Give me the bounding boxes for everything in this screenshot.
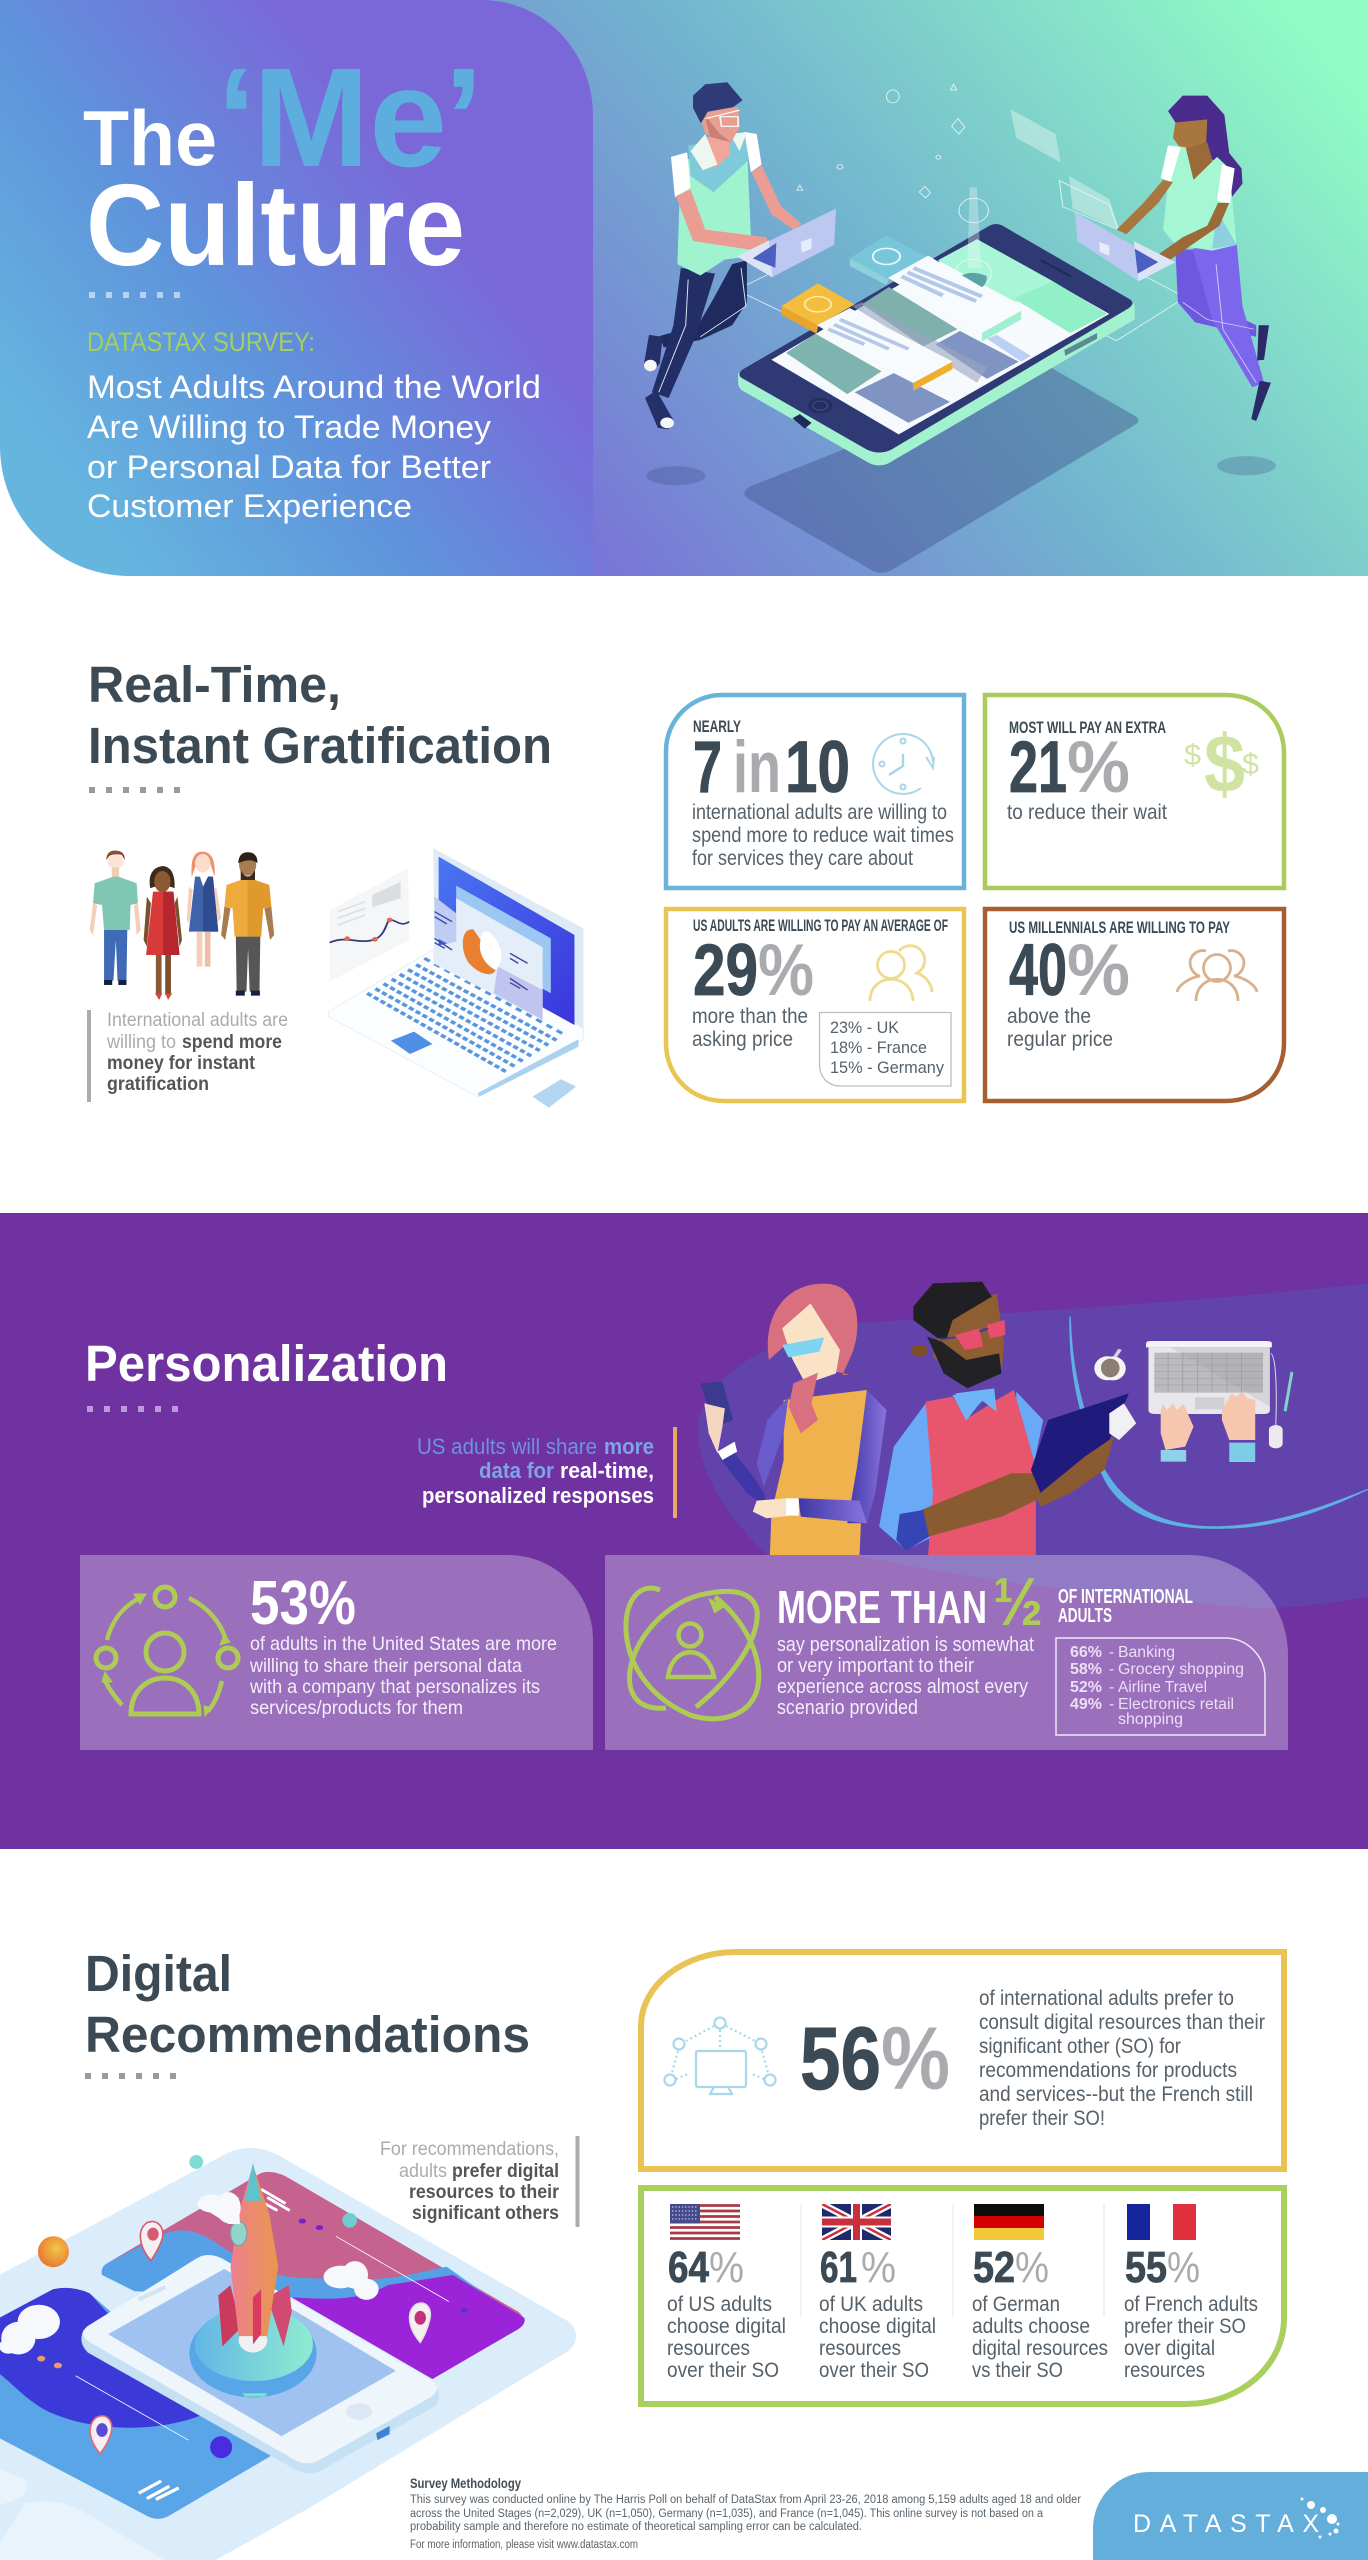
description: say personalization is somewhat xyxy=(777,1633,1034,1656)
description: consult digital resources than their xyxy=(979,2011,1265,2034)
stat card: 21%: to reduce their wait xyxy=(1007,801,1167,824)
stat card: 21% xyxy=(985,695,1284,888)
stat card: 29%: US ADULTS ARE WILLING TO PAY AN AVERAGE OF xyxy=(693,916,948,935)
description: of adults in the United States are more xyxy=(250,1633,557,1655)
subtitle xyxy=(87,369,541,524)
big number xyxy=(1009,930,1130,1011)
caption: share more data: data for xyxy=(479,1458,554,1483)
description: spend more to reduce wait times xyxy=(692,824,954,847)
text: USA: of US adults xyxy=(667,2293,772,2316)
phone shadow and floor shadows xyxy=(647,367,1276,573)
text: Germany: 52 xyxy=(973,2243,1015,2292)
panel: more than half: ADULTS xyxy=(1058,1605,1112,1627)
big number: 7 xyxy=(693,727,722,808)
description: significant other (SO) for xyxy=(979,2035,1181,2058)
icon: dollar signs: $ xyxy=(1204,719,1245,810)
callout: country list: 15% - Germany xyxy=(830,1058,944,1077)
clouds xyxy=(0,2192,379,2355)
stat card: 29%: asking price xyxy=(692,1028,793,1051)
callout: country list: 23% - UK xyxy=(830,1018,900,1037)
dotted divider xyxy=(89,292,180,298)
callout: scenario list: Electronics retail xyxy=(1118,1696,1234,1713)
title xyxy=(83,38,483,290)
section heading: digital recommendations: Recommendations xyxy=(85,2006,530,2063)
icon: person in cycle xyxy=(96,1587,238,1716)
description: experience across almost every xyxy=(777,1675,1029,1698)
text: France xyxy=(1124,2243,1258,2382)
caption: spend more: gratification xyxy=(107,1074,209,1095)
description: of international adults prefer to xyxy=(979,1987,1234,2010)
panel: 53% of US adults: 53% xyxy=(250,1569,356,1638)
card: yellow xyxy=(781,283,953,390)
caption: spend more: spend more xyxy=(182,1032,282,1053)
flag: France xyxy=(1127,2204,1196,2240)
big number: 40 xyxy=(1009,930,1067,1011)
survey methodology footer xyxy=(410,2476,1081,2551)
caption: spend more xyxy=(87,1010,288,1102)
card: blue xyxy=(850,235,1021,341)
callout: scenario list: - xyxy=(1109,1679,1114,1696)
dotted divider xyxy=(87,1406,178,1412)
subtitle: Are Willing to Trade Money xyxy=(87,409,491,445)
description: for services they care about xyxy=(692,847,913,870)
big number: 29 xyxy=(693,930,758,1011)
description: with a company that personalizes its xyxy=(249,1676,540,1698)
text: France: resources xyxy=(1124,2359,1205,2382)
section heading: digital recommendations: Digital xyxy=(85,1945,232,2002)
hero panel with title xyxy=(0,0,593,576)
subtitle: or Personal Data for Better xyxy=(87,449,491,485)
text: USA: % xyxy=(709,2243,744,2292)
icon: three people xyxy=(1177,951,1257,1001)
icon: dollar signs: $ xyxy=(1242,748,1259,781)
hologram beam xyxy=(955,188,991,289)
panel: more than half xyxy=(605,1555,1288,1750)
stat card: 21%: MOST WILL PAY AN EXTRA xyxy=(1009,718,1166,737)
text: USA xyxy=(667,2243,786,2382)
callout: scenario list: 52% xyxy=(1070,1679,1102,1696)
text: France: 55 xyxy=(1125,2243,1167,2292)
section heading: real-time: Real-Time, xyxy=(88,656,341,713)
text: UK: of UK adults xyxy=(819,2293,923,2316)
big number: in xyxy=(733,727,781,808)
laptop base xyxy=(328,950,583,1108)
illustration: phone with rocket on map xyxy=(0,2148,576,2560)
woman figure xyxy=(1075,96,1271,421)
text: UK: % xyxy=(861,2243,896,2292)
stat card: 40%: above the xyxy=(1007,1005,1091,1028)
text: Germany: adults choose xyxy=(972,2315,1090,2338)
caption: share more data: US adults will share xyxy=(417,1434,597,1459)
callout: scenario list: - xyxy=(1109,1661,1114,1678)
big number: % xyxy=(1067,727,1130,808)
stat card: countries xyxy=(641,2188,1284,2404)
callout: country list: 18% - France xyxy=(830,1038,927,1057)
description: scenario provided xyxy=(777,1696,918,1719)
description xyxy=(249,1633,557,1719)
text: Germany: of German xyxy=(972,2293,1060,2316)
text: France: of French adults xyxy=(1124,2293,1258,2316)
description: and services--but the French still xyxy=(979,2083,1253,2106)
floating glyphs xyxy=(740,84,1182,341)
caption: prefer digital: resources to their xyxy=(409,2182,560,2203)
caption: prefer digital: adults xyxy=(399,2161,447,2182)
big number: % xyxy=(758,930,814,1011)
text: USA: choose digital xyxy=(667,2315,786,2338)
stat card: 40%: US MILLENNIALS ARE WILLING TO PAY xyxy=(1009,918,1230,937)
callout: scenario list: Grocery shopping xyxy=(1118,1661,1244,1678)
callout: scenario list: 66% xyxy=(1070,1644,1102,1661)
text: UK: over their SO xyxy=(819,2359,929,2382)
text: UK: choose digital xyxy=(819,2315,936,2338)
section heading: digital recommendations xyxy=(85,1945,530,2063)
text: USA: resources xyxy=(667,2337,750,2360)
hero illustration: people and giant phone xyxy=(644,82,1276,573)
fraction one half: ½ xyxy=(993,1564,1043,1640)
description: or very important to their xyxy=(777,1654,974,1677)
map panel: upper right xyxy=(102,2172,525,2379)
big number: 21 xyxy=(1009,727,1067,808)
caption: share more data: more xyxy=(604,1434,654,1459)
callout: scenario list: Airline Travel xyxy=(1118,1679,1207,1696)
survey methodology footer: Survey Methodology xyxy=(410,2476,521,2491)
big number: 10 xyxy=(785,727,850,808)
blue curve xyxy=(1070,1317,1368,1528)
stat card: 29% xyxy=(666,909,964,1101)
caption: spend more: money for instant xyxy=(107,1053,256,1074)
dotted divider xyxy=(89,787,180,793)
section heading: real-time: Instant Gratification xyxy=(88,717,552,774)
text: Germany: vs their SO xyxy=(972,2359,1063,2382)
title: ’ xyxy=(444,38,483,196)
text: UK: resources xyxy=(819,2337,901,2360)
callout: scenario list: - xyxy=(1109,1644,1114,1661)
subtitle: Most Adults Around the World xyxy=(87,369,541,405)
big number xyxy=(1009,727,1130,808)
text: Germany: digital resources xyxy=(972,2337,1108,2360)
callout: scenario list: 49% xyxy=(1070,1696,1102,1713)
logo panel: DataStax: DATASTAX xyxy=(1133,2510,1319,2538)
logo dots xyxy=(1300,2498,1340,2538)
stat card: 40%: regular price xyxy=(1007,1028,1113,1051)
description xyxy=(979,1987,1265,2130)
survey methodology footer: For more information, please visit www.datastax.com xyxy=(410,2539,638,2551)
text: France: over digital xyxy=(1124,2337,1215,2360)
stat card: 56% xyxy=(641,1952,1284,2169)
title: ‘ xyxy=(217,38,256,196)
floating translucent panels xyxy=(1010,109,1119,230)
map pins xyxy=(90,2221,430,2454)
flag: USA xyxy=(670,2204,740,2240)
icon: two people xyxy=(870,946,932,1001)
big number: % xyxy=(881,2008,950,2108)
base plate xyxy=(0,2148,576,2560)
big number xyxy=(800,2008,950,2108)
text: Germany xyxy=(972,2243,1108,2382)
text: Germany: % xyxy=(1015,2243,1049,2292)
description: international adults are willing to xyxy=(692,801,947,824)
floating balls xyxy=(38,2155,357,2458)
callout: scenario list xyxy=(1056,1638,1265,1735)
chart panel xyxy=(330,868,409,982)
text: France: % xyxy=(1167,2243,1200,2292)
callout: scenario list: Banking xyxy=(1118,1644,1175,1661)
panel: 53% of US adults xyxy=(80,1555,593,1750)
phone xyxy=(738,224,1135,465)
illustration: two people with devices xyxy=(700,1282,1368,1555)
section heading: real-time xyxy=(88,656,552,774)
caption: spend more: International adults are xyxy=(107,1010,288,1031)
big number: % xyxy=(1067,930,1130,1011)
survey methodology footer: across the United Stages (n=2,029), UK (n=1,050), Germany (n=1,035), and France (n=1,045). This online survey is not based on a xyxy=(410,2508,1044,2520)
dotted divider xyxy=(85,2073,176,2079)
text: UK xyxy=(819,2243,936,2382)
stat card: 7 in 10 xyxy=(666,695,964,888)
icon: person in orbit xyxy=(626,1588,759,1719)
logo panel: DataStax xyxy=(1093,2472,1368,2560)
man xyxy=(879,1282,1136,1555)
personalization band xyxy=(0,1213,1368,1849)
big number xyxy=(693,727,850,808)
stat card: 40% xyxy=(985,909,1284,1101)
text: France: prefer their SO xyxy=(1124,2315,1246,2338)
phone xyxy=(81,2255,439,2473)
map panel: lower left xyxy=(0,2288,273,2519)
survey methodology footer: probability sample and therefore no estimate of theoretical sampling error can be calculated. xyxy=(410,2521,862,2533)
description: recommendations for products xyxy=(979,2059,1237,2082)
illustration: swoosh background xyxy=(698,1283,1368,1608)
big number: 56 xyxy=(800,2008,881,2108)
flag: Germany xyxy=(974,2204,1044,2240)
callout: scenario list: shopping xyxy=(1118,1711,1183,1728)
survey methodology footer: This survey was conducted online by The Harris Poll on behalf of DataStax from April 23-26, 2018 among 5,159 adults aged 18 and older xyxy=(410,2494,1081,2506)
text: USA: 64 xyxy=(668,2243,709,2292)
panel: more than half: OF INTERNATIONAL xyxy=(1058,1586,1193,1608)
text: UK: 61 xyxy=(820,2243,857,2292)
stat card: 7 in 10: NEARLY xyxy=(693,717,741,736)
title: The xyxy=(83,94,217,182)
icon: connected monitor xyxy=(664,2018,776,2094)
illustration: laptop xyxy=(328,848,583,1108)
caption: share more data xyxy=(417,1427,677,1518)
caption: prefer digital: prefer digital xyxy=(452,2161,559,2182)
icon: dollar signs xyxy=(1184,719,1259,810)
laptop top view with hands xyxy=(1094,1341,1293,1462)
description: willing to share their personal data xyxy=(249,1655,522,1677)
callout: scenario list: 58% xyxy=(1070,1661,1102,1678)
illustration: four adults xyxy=(90,851,274,1000)
description: prefer their SO! xyxy=(979,2107,1105,2130)
description xyxy=(692,801,954,870)
stat card: 29%: more than the xyxy=(692,1005,808,1028)
caption: prefer digital: significant others xyxy=(412,2203,559,2224)
description: services/products for them xyxy=(250,1697,463,1719)
caption: prefer digital xyxy=(380,2136,580,2227)
laptop screen xyxy=(433,848,583,1028)
description xyxy=(777,1633,1034,1719)
section heading: personalization: Personalization xyxy=(85,1335,448,1392)
callout: country list xyxy=(820,1012,951,1086)
big number xyxy=(693,930,814,1011)
man figure xyxy=(644,82,836,429)
subtitle: Customer Experience xyxy=(87,488,412,524)
callout: scenario list: - xyxy=(1109,1696,1114,1713)
icon: clock xyxy=(873,734,934,794)
launch pad xyxy=(189,2308,317,2397)
icon: dollar signs: $ xyxy=(1184,739,1201,772)
caption: share more data: personalized responses xyxy=(422,1483,654,1508)
hero banner background xyxy=(0,0,1368,576)
caption: share more data: real-time, xyxy=(560,1458,654,1483)
woman xyxy=(700,1284,886,1555)
survey label: DATASTAX SURVEY: xyxy=(87,327,315,357)
title: Me xyxy=(253,38,447,196)
title: Culture xyxy=(86,160,465,290)
panel: more than half: MORE THAN xyxy=(777,1581,987,1633)
text: USA: over their SO xyxy=(667,2359,779,2382)
caption: spend more: willing to xyxy=(106,1032,176,1053)
flag: UK xyxy=(822,2204,891,2240)
caption: prefer digital: For recommendations, xyxy=(380,2139,559,2160)
rocket xyxy=(218,2163,292,2352)
